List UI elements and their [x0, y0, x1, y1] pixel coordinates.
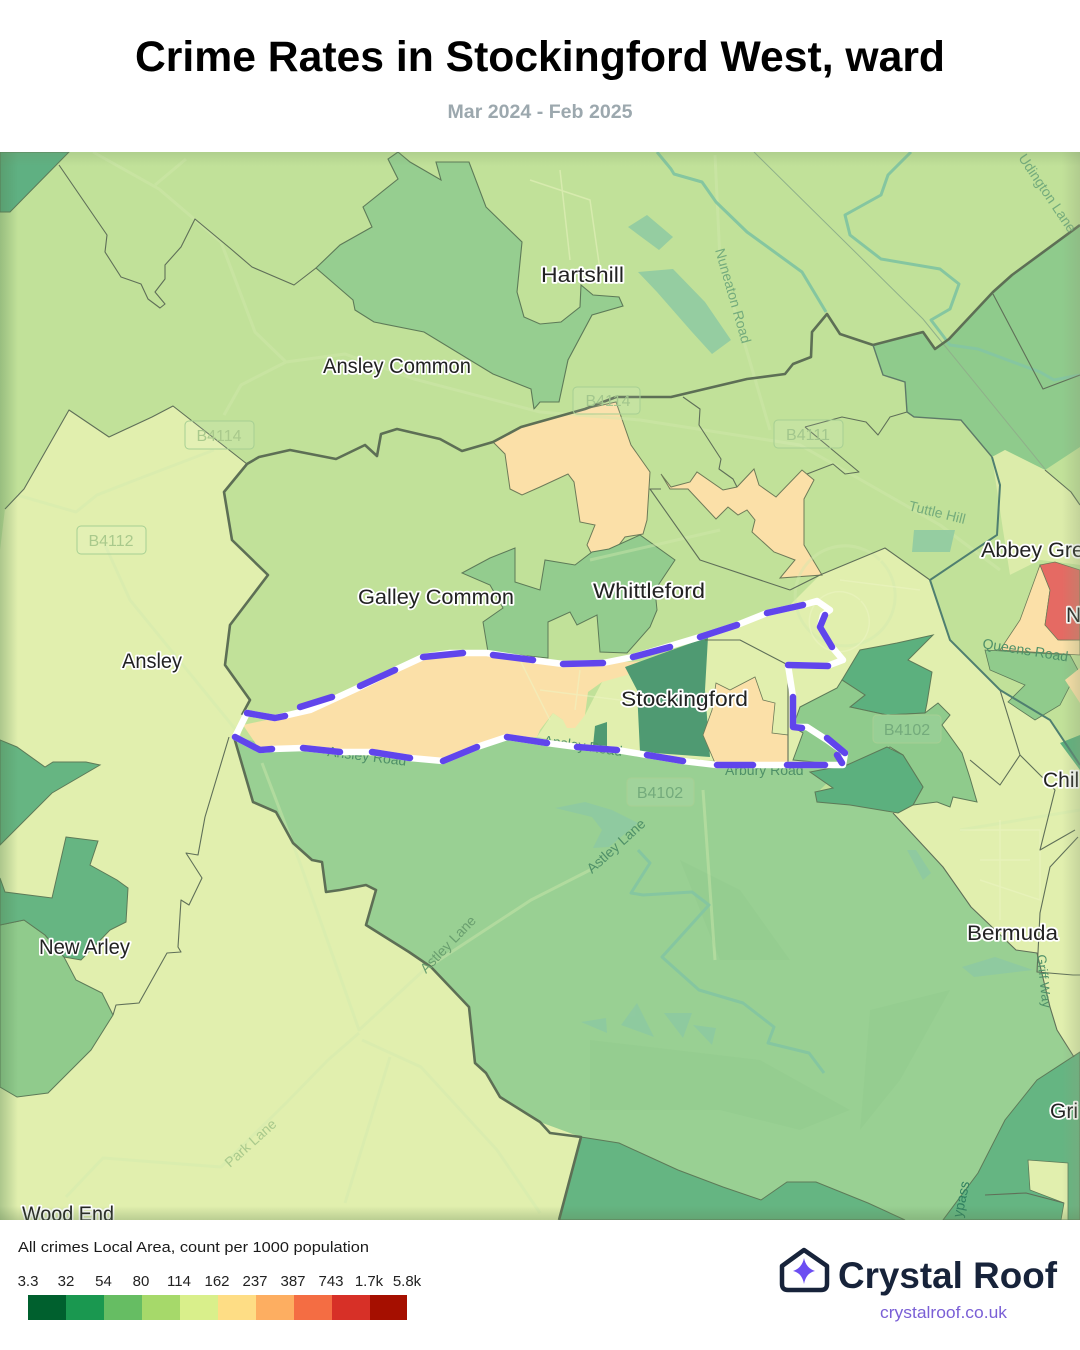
title: Crime Rates in Stockingford West, ward [135, 33, 945, 81]
area: orange north [493, 402, 650, 570]
area: Hartshill green [316, 152, 623, 409]
area: corner dark green [0, 152, 69, 212]
place labels: Gri [1050, 1100, 1078, 1123]
legend [18, 1239, 422, 1320]
area: southern dark green [559, 1137, 905, 1220]
north-east boundary [873, 345, 992, 457]
area: orange east [703, 677, 788, 765]
road labels: B4111 [786, 427, 830, 444]
legend values: 5.8k [393, 1273, 422, 1290]
residential street texture [520, 170, 1040, 920]
legend values: 32 [58, 1273, 74, 1290]
place labels: New Arley [39, 936, 130, 959]
road labels: B4114 [196, 428, 242, 445]
legend colour scale [28, 1295, 407, 1320]
area: Queens Road green [985, 650, 1078, 720]
area: east dark edge [1060, 735, 1080, 770]
legend values: 54 [95, 1273, 112, 1290]
road labels: Ansley Road [543, 732, 623, 759]
road labels: Queens Road [982, 635, 1069, 664]
area: orange north-east [661, 469, 822, 578]
road labels: Tuttle Hill [907, 497, 967, 527]
road labels: B4112 [88, 533, 134, 550]
ward boundary: white base [235, 601, 845, 765]
place labels: Wood End [22, 1203, 114, 1226]
area: east mid green [793, 680, 977, 807]
area: New Arley south green [0, 920, 113, 1097]
road labels: ypass [949, 1180, 973, 1219]
area: east yellow pocket [992, 450, 1080, 575]
area: west dark patch [0, 740, 100, 845]
water: lakes [555, 215, 1033, 1045]
area: south-east dark green [810, 747, 923, 813]
area: Abbey Green red [1040, 562, 1080, 640]
road labels: Park Lane [221, 1115, 280, 1170]
place labels: Ansley Common [323, 355, 471, 378]
road labels: B4102 [637, 785, 683, 802]
area: Whittleford green [462, 535, 675, 658]
road labels: Udington Lane [1016, 151, 1080, 235]
road labels: Astley Lane [417, 912, 479, 976]
area: small dark block [593, 722, 607, 746]
ward boundary: purple dashes [235, 605, 845, 765]
choropleth map [0, 151, 1080, 1226]
soft road network [18, 159, 940, 966]
area: Stockingford dark [625, 637, 710, 757]
legend values: 237 [242, 1273, 268, 1290]
icon: house with star [782, 1250, 827, 1290]
road shields [77, 387, 941, 806]
area: Abbey Green orange [1000, 565, 1080, 655]
road labels: B4102 [884, 722, 930, 739]
legend values: 743 [318, 1273, 344, 1290]
map edge shading [0, 152, 1080, 1220]
area: east orange [1065, 668, 1080, 703]
area: north-east green [873, 225, 1080, 470]
logo: Crystal Roof [782, 1250, 1058, 1322]
thick boundary line [224, 225, 1080, 1220]
area: central yellow [537, 674, 700, 759]
website url: crystalroof.co.uk [880, 1303, 1008, 1322]
river boundary east [930, 457, 1080, 765]
rivers [631, 152, 1080, 1073]
area: east dark green [842, 635, 933, 715]
place labels: Galley Common [358, 586, 514, 609]
area: ward west orange [243, 653, 650, 761]
legend values: 114 [167, 1273, 191, 1290]
railway line [754, 152, 1045, 469]
road labels [88, 151, 1080, 1219]
place labels: Whittleford [593, 580, 705, 603]
road labels: B4114 [585, 393, 631, 410]
legend values: 80 [133, 1273, 149, 1290]
area: western low-crime band [0, 406, 581, 1220]
area: large southern green [234, 737, 1074, 1220]
road labels: Ansley Road [327, 743, 407, 769]
legend values [18, 1273, 422, 1290]
legend values: 387 [280, 1273, 306, 1290]
area: south-east small yellow patch [1028, 1160, 1068, 1220]
subtitle: date range: Mar 2024 - Feb 2025 [448, 102, 633, 123]
place labels: Hartshill [541, 264, 624, 287]
area: New Arley dark [0, 837, 128, 960]
area: east light strip [930, 535, 1080, 770]
legend values: 162 [204, 1273, 230, 1290]
place labels: Ansley [122, 650, 182, 673]
road labels: Nuneaton Road [712, 246, 755, 345]
logo wordmark: Crystal Roof [838, 1255, 1058, 1296]
place labels: Stockingford [621, 688, 748, 711]
area: south-east corner green [943, 1052, 1080, 1220]
legend values: 3.3 [18, 1273, 38, 1290]
place labels: Bermuda [967, 922, 1058, 945]
area: subtle darker farmland [590, 860, 950, 1130]
road labels: Griff Way [1034, 954, 1055, 1009]
road labels: Arbury Road [725, 762, 804, 778]
road labels: Astley Lane [583, 815, 649, 876]
legend values: 1.7k [355, 1273, 384, 1290]
place labels: Chil [1043, 769, 1079, 792]
area: south-east yellow [700, 548, 1080, 1057]
legend title: All crimes Local Area, count per 1000 population [18, 1239, 369, 1256]
place labels [22, 264, 1080, 1226]
thin area boundaries [5, 165, 1080, 1203]
